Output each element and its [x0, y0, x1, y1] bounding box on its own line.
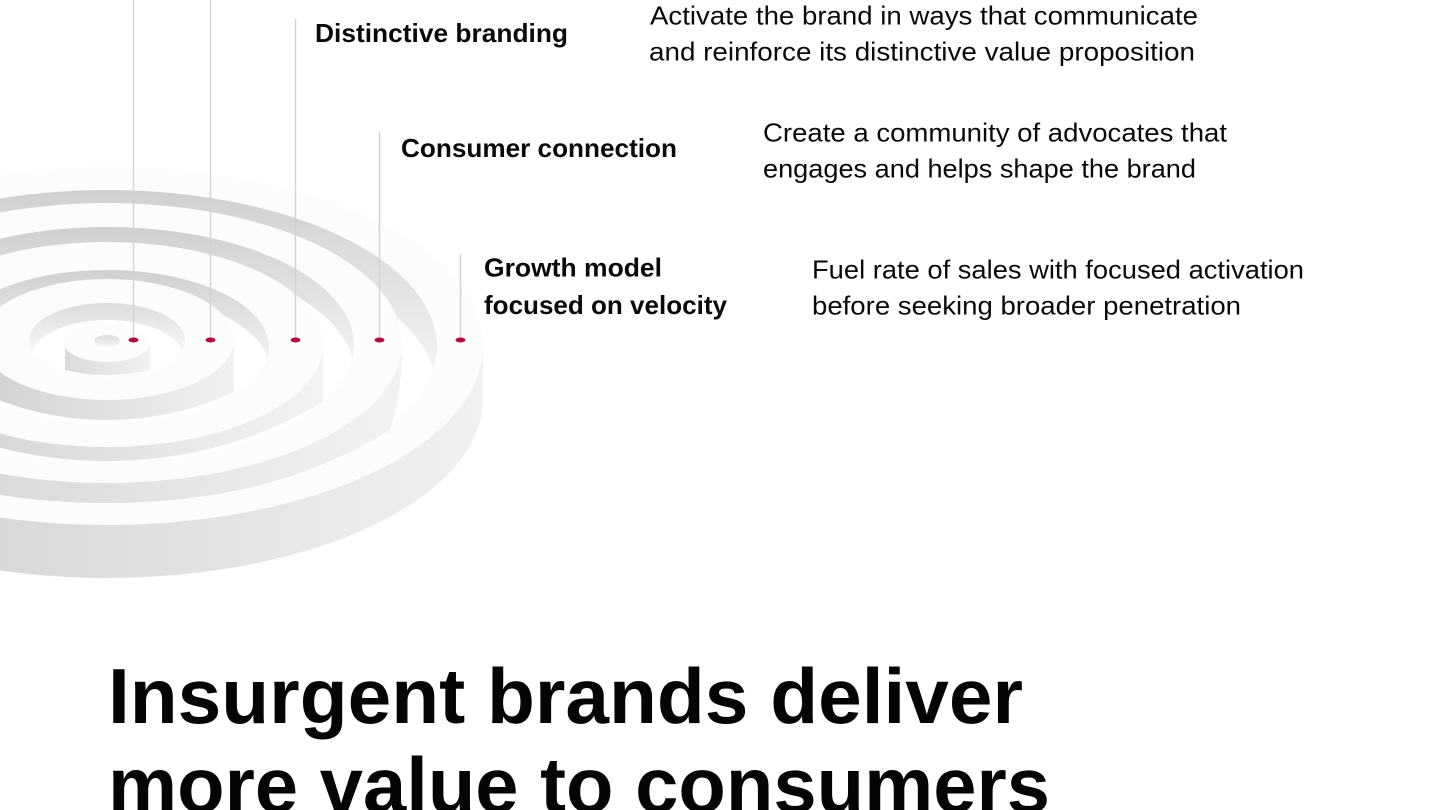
- label: Growth model focused on velocity: [484, 252, 728, 320]
- groove floor 1: [0, 318, 434, 504]
- leader line 4: [374, 132, 384, 342]
- description: distinctive branding: Activate the brand in ways that communicate: [650, 0, 1198, 30]
- description: distinctive branding: and reinforce its distinctive value proposition: [649, 36, 1195, 66]
- groove wall 1: [0, 190, 437, 504]
- description: consumer connection: engages and helps shape the brand: [763, 154, 1196, 184]
- description: growth model: Fuel rate of sales with focused activation: [812, 254, 1304, 284]
- description: consumer connection: [763, 118, 1228, 184]
- ring 4 wall: [0, 346, 402, 503]
- leader line 5: [456, 254, 466, 342]
- core pit: [94, 335, 120, 347]
- core disc top surface: [64, 324, 150, 362]
- label: Growth model focused on velocity: Growth model: [484, 252, 662, 282]
- title: Insurgent brands deliver: [108, 652, 1023, 740]
- groove floor 2: [0, 298, 352, 463]
- label: Distinctive branding: Distinctive branding: [315, 18, 568, 48]
- ring 3 wall: [0, 346, 323, 461]
- ring 3 top surface: [0, 242, 323, 447]
- title: [108, 652, 1050, 810]
- description: growth model: before seeking broader penetration: [812, 290, 1241, 320]
- leader line 2: [206, 0, 216, 342]
- description: distinctive branding: [649, 0, 1198, 66]
- groove floor 4: [33, 320, 181, 350]
- core disc wall: [65, 344, 150, 375]
- leader line 1: [128, 0, 138, 342]
- label: Consumer connection: Consumer connection: [401, 133, 677, 163]
- groove floor 3: [0, 316, 267, 424]
- label: Growth model focused on velocity: focused on velocity: [484, 290, 728, 320]
- leader line 3: [290, 19, 300, 342]
- outer disc top surface: [0, 167, 483, 525]
- description: consumer connection: Create a community of advocates that: [763, 118, 1228, 148]
- ring 2 wall: [0, 345, 234, 420]
- ring 2 top surface: [0, 279, 234, 400]
- ring 4 top surface: [0, 203, 402, 483]
- description: growth model: [812, 254, 1304, 320]
- groove wall 2: [0, 227, 354, 463]
- groove wall 3: [0, 270, 269, 424]
- chart: concentric ring target: [0, 167, 483, 578]
- outer disc wall: [0, 346, 483, 578]
- groove wall 4: [29, 303, 185, 377]
